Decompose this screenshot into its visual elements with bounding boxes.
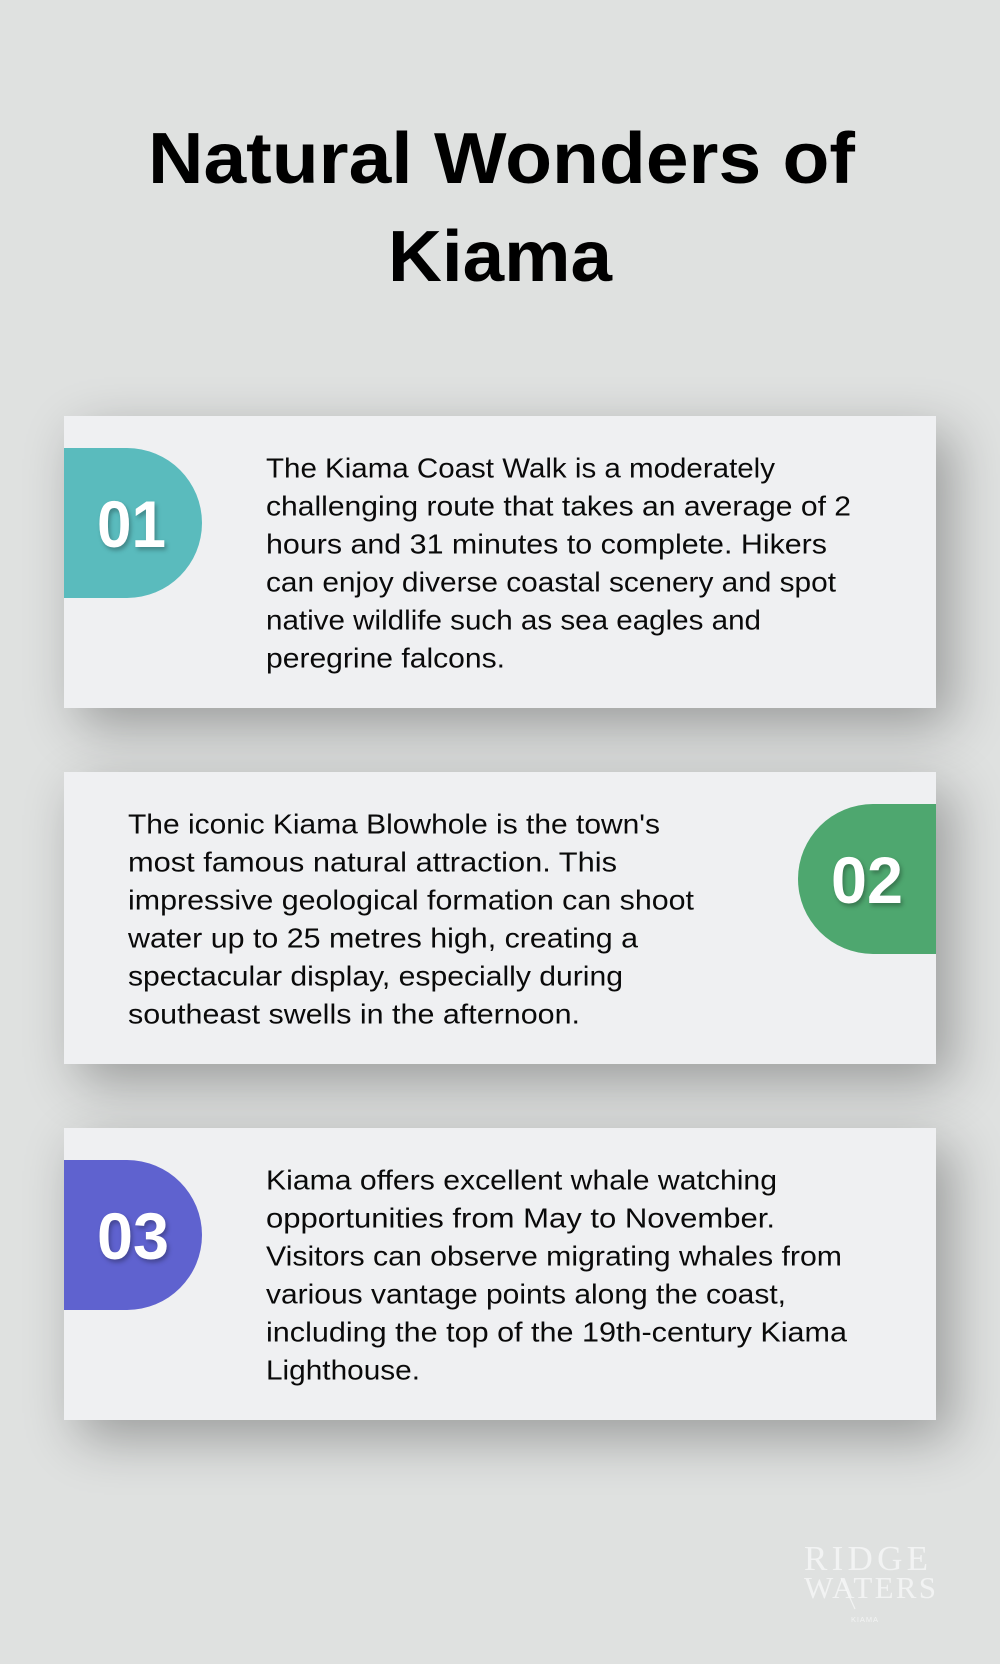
badge: 01	[64, 448, 202, 598]
logo: Ridge Waters Kiama: WATERS	[804, 1570, 936, 1605]
title: Natural Wonders of	[148, 119, 856, 199]
text: blowhole description: water up to 25 metres high, creating a	[127, 922, 638, 954]
text: whale watching description: Lighthouse.	[266, 1354, 420, 1386]
text: coast walk description: peregrine falcons.	[266, 642, 505, 674]
logo: Ridge Waters Kiama: RIDGE	[804, 1539, 928, 1578]
text: whale watching description: Visitors can observe migrating whales from	[266, 1240, 842, 1272]
text: coast walk description	[266, 452, 851, 674]
number 01: 01	[97, 487, 166, 561]
text: coast walk description: can enjoy diverse coastal scenery and spot	[266, 566, 836, 598]
logo: Ridge Waters Kiama: KIAMA	[851, 1615, 878, 1624]
text: blowhole description: The iconic Kiama Blowhole is the town's	[128, 808, 660, 840]
title	[148, 119, 856, 297]
text: blowhole description: spectacular display, especially during	[128, 960, 623, 992]
panel: Kiama Blowhole	[64, 772, 936, 1064]
title: Kiama	[388, 217, 613, 297]
text: blowhole description	[127, 808, 694, 1030]
text: whale watching description: various vantage points along the coast,	[266, 1278, 786, 1310]
text: whale watching description	[266, 1164, 847, 1386]
text: coast walk description: challenging route that takes an average of 2	[266, 490, 851, 522]
panel: whale watching	[64, 1128, 936, 1420]
text: coast walk description: hours and 31 minutes to complete. Hikers	[266, 528, 827, 560]
text: coast walk description: The Kiama Coast Walk is a moderately	[266, 452, 775, 484]
number 03: 03	[97, 1199, 169, 1273]
text: whale watching description: Kiama offers excellent whale watching	[266, 1164, 777, 1196]
text: coast walk description: native wildlife such as sea eagles and	[266, 604, 761, 636]
text: whale watching description: opportunities from May to November.	[266, 1202, 775, 1234]
text: whale watching description: including the top of the 19th-century Kiama	[266, 1316, 847, 1348]
badge: 02	[798, 804, 936, 954]
number 02: 02	[831, 843, 903, 917]
text: blowhole description: impressive geological formation can shoot	[128, 884, 694, 916]
text: blowhole description: southeast swells in the afternoon.	[128, 998, 580, 1030]
badge: 03	[64, 1160, 202, 1310]
text: blowhole description: most famous natural attraction. This	[128, 846, 617, 878]
panel: Kiama Coast Walk	[64, 416, 936, 708]
